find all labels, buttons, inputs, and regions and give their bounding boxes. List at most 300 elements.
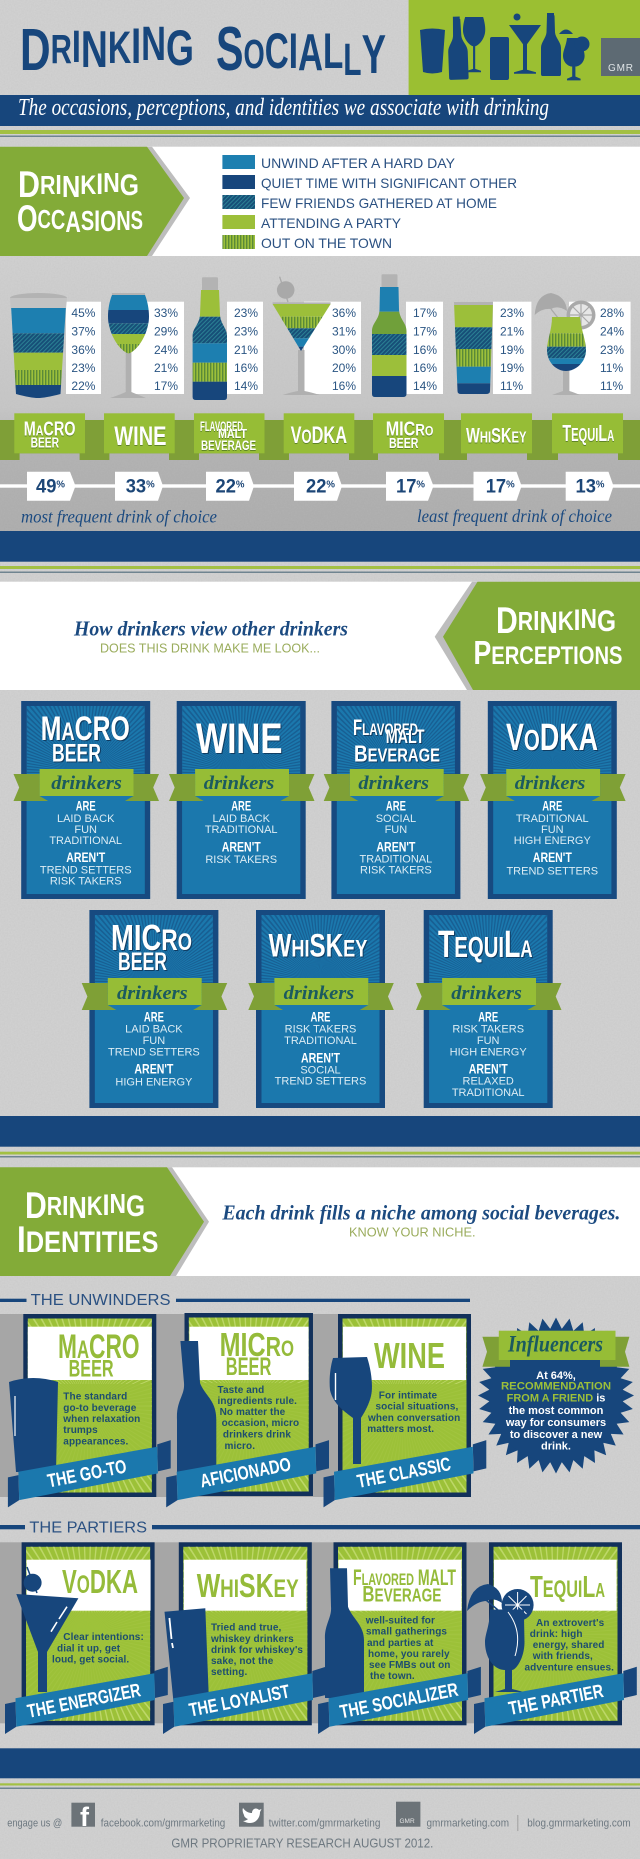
- panel: tequila drinkers: AREN'T: [469, 1061, 508, 1077]
- wine percentages: 17%: [154, 379, 178, 393]
- description: trumps: [63, 1425, 98, 1436]
- heading: D: [18, 164, 45, 205]
- banner: [5, 1667, 168, 1734]
- whiskey percentages: 19%: [500, 361, 524, 375]
- description: [52, 1632, 144, 1666]
- chart: whiskey glass: [454, 302, 493, 394]
- panel: tequila drinkers: drinkers: [451, 983, 522, 1004]
- panel: wine drinkers: drinkers: [204, 773, 274, 794]
- GMR logo box: GMR: [608, 63, 634, 74]
- description: social situations,: [376, 1402, 459, 1412]
- panel: vodka drinkers: HIGH ENERGY: [514, 835, 591, 847]
- heading second line: C: [51, 204, 65, 235]
- description: [218, 1385, 299, 1452]
- subtitle script: Each drink fills a niche among social beverages.: [221, 1200, 620, 1224]
- panel: tequila drinkers: [413, 907, 563, 1108]
- description: drink: high: [530, 1629, 583, 1640]
- panel: wine the classic: WINE: [374, 1335, 445, 1376]
- icon: GMR logo: GMR: [400, 1818, 415, 1825]
- whiskey percentages: [500, 306, 524, 393]
- heading: I: [574, 604, 580, 637]
- panel: flavored malt beverage drinkers: drinkers: [358, 773, 429, 794]
- banner: THE ENERGIZER: [26, 1680, 143, 1723]
- panel: wine drinkers: ARE: [231, 798, 251, 814]
- panel: drinking occasions header: [0, 147, 640, 256]
- description: For intimate: [379, 1390, 438, 1402]
- panel: flavored malt beverage the socializer: BEVERAGE: [362, 1582, 441, 1607]
- legend: QUIET TIME WITH SIGNIFICANT OTHER: [261, 175, 517, 191]
- least frequent caption: least frequent drink of choice: [417, 506, 612, 526]
- callout text: FROM A FRIEND is: [507, 1393, 605, 1405]
- flavored malt beverage percentages: 23%: [234, 306, 258, 320]
- icon: facebook: [71, 1802, 95, 1832]
- icon: GMR logo: [396, 1802, 420, 1827]
- most frequent caption: most frequent drink of choice: [21, 507, 217, 527]
- panel: vodka drinkers: FUN: [541, 824, 564, 836]
- panel: wine drinkers: LAID BACK: [212, 813, 271, 825]
- heading second line: A: [65, 206, 81, 239]
- legend: UNWIND AFTER A HARD DAY: [261, 155, 456, 171]
- icon: beer glass: [9, 1378, 58, 1472]
- description: The standard: [63, 1392, 127, 1402]
- frequency line with tags: 22: [216, 476, 237, 498]
- panel: tequila drinkers: RISK TAKERS: [452, 1024, 524, 1036]
- panel: whiskey drinkers: ARE: [310, 1009, 330, 1025]
- panel: whiskey drinkers: TRADITIONAL: [284, 1035, 357, 1047]
- label: vodka: VODKA: [291, 422, 347, 449]
- micro beer percentages: 17%: [413, 324, 437, 338]
- heading: N: [103, 167, 120, 198]
- subtitle script: How drinkers view other drinkers: [73, 617, 348, 641]
- description: the town.: [370, 1671, 415, 1682]
- description: well-suited for: [365, 1616, 435, 1626]
- description: go-to beverage: [63, 1403, 137, 1414]
- heading second line: S: [81, 205, 94, 236]
- frequency line with tags: %: [596, 480, 605, 490]
- panel: vodka drinkers: TREND SETTERS: [506, 865, 598, 877]
- panel: macro beer drinkers: RISK TAKERS: [50, 876, 122, 888]
- panel: vodka drinkers: AREN'T: [533, 849, 572, 865]
- panel: flavored malt beverage drinkers: ARE: [386, 798, 406, 814]
- heading: K: [80, 170, 97, 200]
- callout text: At 64%,: [536, 1370, 576, 1382]
- micro beer percentages: 17%: [413, 306, 437, 320]
- banner: [8, 1440, 171, 1507]
- icon: martini glass: [16, 1567, 78, 1692]
- panel: macro beer drinkers: TRADITIONAL: [49, 835, 122, 847]
- panel: macro beer drinkers: drinkers: [51, 773, 122, 794]
- panel: macro beer drinkers: BEER: [52, 740, 101, 768]
- callout text: drink.: [541, 1441, 571, 1453]
- heading: N: [109, 1188, 126, 1219]
- banner: AFICIONADO: [198, 1454, 293, 1493]
- description: [62, 1392, 140, 1448]
- whiskey percentages: 19%: [500, 343, 524, 357]
- heading: G: [126, 1190, 145, 1223]
- panel: whiskey drinkers: AREN'T: [301, 1049, 340, 1065]
- flavored malt beverage percentages: 14%: [234, 379, 258, 393]
- panel: macro beer drinkers: LAID BACK: [57, 813, 115, 825]
- navy band: [0, 1748, 640, 1778]
- description: when relaxation: [62, 1414, 140, 1425]
- micro beer percentages: 16%: [413, 361, 437, 375]
- label: micro beer: BEER: [389, 435, 419, 452]
- micro beer percentages: 14%: [413, 379, 437, 393]
- flavored malt beverage percentages: 21%: [234, 343, 258, 357]
- panel: flavored malt beverage drinkers: MALT: [386, 727, 425, 748]
- legend: FEW FRIENDS GATHERED AT HOME: [261, 195, 497, 211]
- description: [524, 1618, 614, 1674]
- header title second word: L: [343, 34, 362, 85]
- panel: micro beer drinkers: AREN'T: [134, 1061, 174, 1077]
- panel: whiskey drinkers: TREND SETTERS: [275, 1076, 366, 1088]
- description: drinkers drink: [223, 1430, 291, 1440]
- banner: [474, 1667, 637, 1734]
- micro beer percentages: [413, 306, 437, 393]
- panel: vodka drinkers: TRADITIONAL: [516, 813, 589, 825]
- chart: tequila cocktail glass: [535, 293, 596, 395]
- frequency line with tags: %: [236, 480, 245, 490]
- legend: OUT ON THE TOWN: [261, 235, 392, 251]
- heading: I: [62, 1190, 68, 1221]
- panel: flavored malt beverage drinkers: [321, 698, 471, 899]
- panel: macro beer the go-to: MACRO: [58, 1328, 140, 1366]
- callout text: [501, 1370, 611, 1453]
- icon: bottle: [177, 1341, 216, 1472]
- panel: tequila the partier: TEQUILA: [530, 1569, 605, 1604]
- description: small gatherings: [366, 1626, 447, 1638]
- callout text: the most common: [509, 1405, 604, 1417]
- panel: micro beer drinkers: BEER: [118, 948, 167, 976]
- description: see FMBs out on: [369, 1660, 451, 1671]
- label: wine: WINE: [114, 421, 166, 451]
- panel: micro beer drinkers: ARE: [144, 1009, 164, 1025]
- panel: flavored malt beverage drinkers: AREN'T: [376, 838, 416, 854]
- percentage panels: [66, 302, 631, 394]
- header title second word: L: [323, 23, 343, 79]
- panel: tequila drinkers: FUN: [477, 1035, 500, 1047]
- label: macro beer: BEER: [31, 435, 59, 452]
- description: occasion, micro: [222, 1418, 299, 1429]
- heading: G: [597, 605, 616, 638]
- banner: THE PARTIER: [507, 1681, 605, 1720]
- subtitle caps: DOES THIS DRINK MAKE ME LOOK...: [100, 642, 320, 656]
- description: Taste and: [218, 1385, 264, 1396]
- banner: THE CLASSIC: [355, 1454, 453, 1493]
- chart: macro beer glass: [10, 293, 67, 398]
- heading second line: O: [17, 198, 46, 239]
- label: flavored malt beverage: [200, 419, 256, 453]
- gray band behind partiers: [0, 1542, 622, 1723]
- callout: influencers: [468, 1308, 640, 1483]
- flavored malt beverage percentages: 23%: [234, 324, 258, 338]
- banner: THE LOYALIST: [187, 1681, 292, 1722]
- heading: I: [533, 605, 539, 636]
- heading second line: IDENTITIES: [17, 1219, 158, 1260]
- frequency line with tags: 22: [306, 476, 327, 498]
- header green panel with drink icons: [409, 0, 640, 95]
- tequila percentages: 28%: [600, 306, 624, 320]
- frequency line with tags: 13: [576, 476, 597, 498]
- panel: flavored malt beverage drinkers: FLAVORED: [353, 715, 418, 740]
- macro beer percentages: 37%: [71, 324, 96, 338]
- description: ingredients rule.: [218, 1396, 297, 1407]
- ribbon: [482, 1331, 629, 1367]
- source note: GMR PROPRIETARY RESEARCH AUGUST 2012.: [171, 1835, 433, 1850]
- banner: [318, 1667, 481, 1734]
- vodka percentages: 30%: [332, 343, 356, 357]
- panel: wine drinkers: WINE: [196, 715, 282, 763]
- wine percentages: 33%: [154, 306, 178, 320]
- description: Clear intentions:: [63, 1632, 144, 1643]
- chart: micro beer bottle: [372, 274, 406, 397]
- header title: N: [81, 21, 108, 79]
- heading: R: [518, 606, 533, 636]
- description: matters most.: [367, 1424, 434, 1435]
- icon: twitter: [239, 1803, 264, 1827]
- panel: whiskey drinkers: WHISKEY: [269, 928, 367, 964]
- panel: macro beer the go-to: [0, 1314, 179, 1507]
- heading: D: [25, 1185, 52, 1226]
- heading second line: N: [116, 205, 131, 236]
- header title: K: [108, 22, 132, 73]
- frequency line with tags: 33: [126, 476, 147, 498]
- description: [367, 1390, 460, 1435]
- label: micro beer: [386, 418, 434, 452]
- heading: N: [539, 605, 558, 640]
- macro beer percentages: 23%: [71, 361, 96, 375]
- divider: [0, 1152, 640, 1158]
- panel: whiskey the loyalist: WHISKEY: [197, 1567, 299, 1604]
- panel: micro beer aficionado: [161, 1313, 335, 1507]
- website link: gmrmarketing.com: [426, 1818, 509, 1830]
- banner: THE GO-TO: [46, 1457, 128, 1492]
- panel: flavored malt beverage drinkers: FUN: [385, 824, 407, 836]
- whiskey percentages: 21%: [500, 324, 524, 338]
- icon: facebook: f: [80, 1802, 90, 1832]
- divider: [0, 130, 640, 137]
- heading: D: [496, 600, 523, 641]
- panel: drinking perceptions header: [0, 582, 640, 690]
- panel: micro beer drinkers: LAID BACK: [125, 1024, 183, 1036]
- heading: K: [558, 606, 574, 636]
- description: Tried and true,: [211, 1622, 282, 1634]
- banner: [163, 1667, 326, 1734]
- macro beer percentages: 22%: [71, 379, 96, 393]
- panel: vodka drinkers: drinkers: [515, 773, 585, 794]
- callout text: to discover a new: [510, 1429, 603, 1441]
- GMR logo box: [601, 38, 640, 76]
- frequency line with tags: 49: [36, 476, 57, 498]
- heading second line: O: [100, 206, 116, 238]
- panel: whiskey drinkers: drinkers: [284, 983, 354, 1004]
- description: loud, get social.: [52, 1654, 129, 1666]
- heading second line: C: [38, 204, 51, 234]
- chart: vodka martini glass: [270, 277, 334, 395]
- frequency line with tags: %: [506, 480, 515, 490]
- subtitle caps: KNOW YOUR NICHE.: [349, 1226, 476, 1240]
- blog link: blog.gmrmarketing.com: [527, 1818, 631, 1830]
- twitter link: twitter.com/gmrmarketing: [269, 1818, 380, 1830]
- panel: macro beer the go-to: BEER: [69, 1356, 114, 1383]
- heading: K: [87, 1191, 103, 1221]
- heading: the unwinders: [0, 1292, 470, 1309]
- vodka percentages: 16%: [332, 379, 356, 393]
- icon: bottle: [325, 1568, 364, 1698]
- flavored malt beverage percentages: 16%: [234, 361, 258, 375]
- vodka percentages: 36%: [332, 306, 356, 320]
- tequila percentages: [600, 306, 624, 393]
- panel: wine drinkers: [166, 698, 316, 899]
- description: micro.: [224, 1441, 255, 1452]
- banner: [324, 1440, 486, 1507]
- heading: the unwinders: THE UNWINDERS: [31, 1292, 171, 1309]
- panel: tequila the partier: [465, 1542, 640, 1734]
- macro beer percentages: 36%: [71, 343, 96, 357]
- frequency line with tags: %: [146, 480, 155, 490]
- panel: micro beer drinkers: HIGH ENERGY: [115, 1076, 193, 1088]
- frequency line with tags: %: [56, 480, 65, 490]
- header title second word: A: [298, 24, 323, 82]
- tequila percentages: 23%: [600, 343, 624, 357]
- frequency line with tags: 17: [486, 476, 507, 498]
- description: No matter the: [220, 1407, 286, 1418]
- macro beer percentages: 45%: [71, 306, 96, 320]
- chart: wine glass: [108, 293, 149, 398]
- description: home, you rarely: [368, 1649, 450, 1660]
- panel: vodka drinkers: ARE: [542, 798, 562, 814]
- panel: tequila drinkers: TEQUILA: [438, 924, 533, 966]
- facebook link: facebook.com/gmrmarketing: [101, 1818, 225, 1830]
- heading: I: [96, 168, 103, 201]
- label: micro beer: MICRO: [386, 418, 434, 441]
- footer links: [7, 1802, 631, 1832]
- heading: N: [68, 1190, 87, 1225]
- micro beer percentages: 16%: [413, 343, 437, 357]
- heading: the partiers: [0, 1520, 640, 1537]
- panel: vodka drinkers: [477, 698, 627, 899]
- heading: G: [120, 169, 139, 202]
- header title second word: Y: [362, 23, 386, 85]
- label: macro beer: MACRO: [24, 418, 76, 441]
- description: with friends,: [532, 1651, 593, 1662]
- frequency line with tags: %: [326, 480, 335, 490]
- label: tequila: TEQUILA: [562, 420, 615, 446]
- header title: I: [131, 18, 141, 74]
- wine percentages: 24%: [154, 343, 178, 357]
- navy band: [0, 531, 640, 562]
- whiskey percentages: 11%: [500, 379, 523, 393]
- callout text: RECOMMENDATION: [501, 1381, 611, 1393]
- whiskey percentages: 23%: [500, 306, 524, 320]
- panel: flavored malt beverage the socializer: [310, 1542, 490, 1734]
- header title second word: S: [216, 15, 257, 84]
- chart: flavored malt beverage bottle: [192, 277, 227, 400]
- macro beer percentages: [71, 306, 96, 393]
- panel: micro beer aficionado: BEER: [226, 1353, 271, 1381]
- panel: micro beer aficionado: MICRO: [220, 1326, 294, 1363]
- engage label: engage us @: [7, 1818, 62, 1830]
- panel: tequila drinkers: RELAXED: [463, 1076, 514, 1088]
- description: adventure ensues.: [524, 1662, 614, 1674]
- header title second word: CI: [265, 23, 303, 79]
- legend: ATTENDING A PARTY: [261, 215, 402, 231]
- panel: wine drinkers: TRADITIONAL: [205, 824, 278, 836]
- label: whiskey: WHISKEY: [466, 425, 527, 448]
- header title: N: [141, 18, 166, 71]
- description: energy, shared: [533, 1640, 605, 1651]
- header title: G: [166, 20, 194, 76]
- panel: flavored malt beverage drinkers: BEVERAGE: [354, 741, 440, 767]
- panel: micro beer drinkers: drinkers: [117, 983, 188, 1004]
- description: [365, 1616, 451, 1682]
- frequency line with tags: 17: [396, 476, 417, 498]
- panel: micro beer drinkers: MICRO: [111, 917, 192, 958]
- icon: whiskey glass: [164, 1608, 209, 1702]
- panel: tequila drinkers: HIGH ENERGY: [450, 1046, 527, 1058]
- heading second line: S: [131, 205, 143, 235]
- panel: flavored malt beverage drinkers: SOCIAL: [376, 813, 416, 825]
- description: An extrovert's: [536, 1618, 605, 1629]
- heading: I: [103, 1189, 109, 1222]
- description: [210, 1622, 303, 1678]
- panel: tequila drinkers: TRADITIONAL: [452, 1087, 525, 1099]
- divider: [0, 566, 640, 573]
- panel: micro beer drinkers: FUN: [143, 1035, 165, 1047]
- flavored malt beverage percentages: [234, 306, 258, 393]
- header title second word: O: [244, 31, 265, 77]
- heading second line: I: [94, 205, 100, 238]
- panel: whiskey drinkers: RISK TAKERS: [285, 1024, 356, 1036]
- drink name ribbon: [0, 413, 640, 460]
- panel: flavored malt beverage drinkers: RISK TAKERS: [360, 865, 432, 877]
- label: flavored malt beverage: FLAVORED: [200, 419, 243, 434]
- panel: flavored malt beverage the socializer: FLAVORED MALT: [353, 1565, 456, 1590]
- tequila percentages: 11%: [600, 379, 623, 393]
- description: sake, not the: [211, 1656, 274, 1667]
- panel: micro beer drinkers: [79, 907, 229, 1108]
- panel: whiskey drinkers: SOCIAL: [300, 1065, 341, 1077]
- panel: flavored malt beverage drinkers: TRADITIONAL: [360, 853, 432, 865]
- banner: THE SOCIALIZER: [338, 1680, 460, 1723]
- panel: tequila drinkers: ARE: [478, 1009, 498, 1025]
- wine percentages: [154, 306, 178, 393]
- tequila percentages: 24%: [600, 324, 624, 338]
- panel: micro beer drinkers: TREND SETTERS: [108, 1046, 200, 1058]
- description: drink for whiskey's: [211, 1645, 303, 1656]
- icon: wine glass: [330, 1357, 372, 1464]
- heading: the partiers: THE PARTIERS: [29, 1520, 147, 1537]
- panel: macro beer drinkers: MACRO: [41, 710, 130, 748]
- wine percentages: 21%: [154, 361, 178, 375]
- heading: I: [55, 169, 62, 200]
- panel: macro beer drinkers: TREND SETTERS: [40, 865, 132, 877]
- tequila percentages: 11%: [600, 361, 623, 375]
- panel: macro beer drinkers: AREN'T: [66, 849, 106, 865]
- vodka percentages: 20%: [332, 361, 356, 375]
- panel: wine drinkers: RISK TAKERS: [205, 854, 277, 866]
- label: flavored malt beverage: BEVERAGE: [201, 437, 256, 453]
- icon: cocktail glass: [467, 1584, 534, 1692]
- panel: macro beer drinkers: [11, 698, 161, 899]
- description: when conversation: [367, 1413, 460, 1424]
- callout text: way for consumers: [505, 1417, 606, 1429]
- frequency line with tags: %: [416, 480, 425, 490]
- heading: N: [62, 169, 80, 204]
- description: dial it up, get: [57, 1644, 121, 1654]
- ribbon: Influencers: [507, 1332, 603, 1357]
- header title: I: [72, 21, 81, 72]
